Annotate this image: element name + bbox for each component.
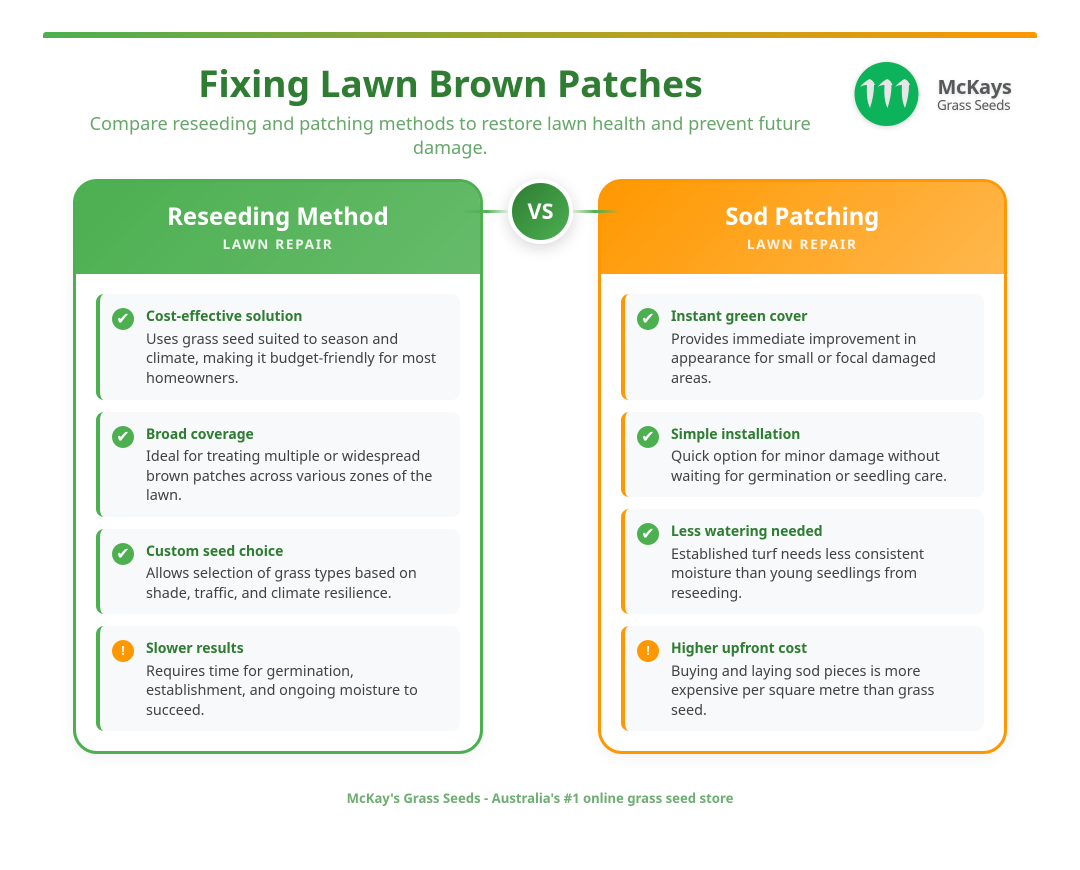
item: instant green cover: Provides immediate improvement in <box>671 330 916 348</box>
item: instant green cover: areas. <box>671 368 712 388</box>
title: Fixing Lawn Brown Patches <box>198 56 703 108</box>
panel header <box>76 182 480 274</box>
panel header: LAWN REPAIR <box>747 234 858 253</box>
item: higher upfront cost: expensive per square metre than grass <box>671 681 934 700</box>
item: broad coverage: Broad coverage <box>146 425 254 444</box>
item: broad coverage: Ideal for treating multiple or widespread <box>146 447 420 466</box>
item: simple installation: Quick option for minor damage without <box>671 447 940 466</box>
VS badge: VS <box>528 197 553 226</box>
item: cost-effective solution: ✔ <box>116 309 130 328</box>
item: custom seed choice: shade, traffic, and climate resilience. <box>146 584 392 602</box>
item: broad coverage: ✔ <box>116 427 130 446</box>
subtitle: damage. <box>413 136 488 160</box>
item: instant green cover: appearance for small or focal damaged <box>671 349 936 368</box>
item: cost-effective solution: Cost-effective solution <box>146 307 302 326</box>
item: custom seed choice: ✔ <box>116 544 130 563</box>
panel: sod patching <box>598 179 1007 754</box>
item: instant green cover <box>621 294 984 400</box>
item: higher upfront cost: Buying and laying sod pieces is more <box>671 662 920 680</box>
item: simple installation: waiting for germination or seedling care. <box>671 466 947 486</box>
item: slower results: establishment, and ongoing moisture to <box>146 681 418 700</box>
item: custom seed choice: Allows selection of grass types based on <box>146 564 417 583</box>
item: higher upfront cost: ! <box>646 642 650 659</box>
logo wordmark: McKays <box>938 73 1012 100</box>
item: instant green cover: ✔ <box>641 309 655 328</box>
item: less watering needed: Established turf needs less consistent <box>671 544 924 564</box>
item: custom seed choice: Custom seed choice <box>146 542 283 561</box>
VS badge <box>508 179 573 244</box>
subtitle: Compare reseeding and patching methods to restore lawn health and prevent future <box>90 112 811 136</box>
item: instant green cover: Instant green cover <box>671 307 808 326</box>
logo wordmark <box>937 73 1012 114</box>
top gradient bar <box>43 32 1037 38</box>
item: higher upfront cost <box>621 626 984 731</box>
panel: reseeding method <box>73 179 483 754</box>
icon: green circle with grass blades <box>852 60 921 130</box>
item: higher upfront cost: seed. <box>671 700 707 720</box>
item: broad coverage <box>96 412 460 517</box>
connector line left <box>462 210 510 213</box>
panel header: LAWN REPAIR <box>223 234 333 253</box>
item: cost-effective solution: climate, making it budget-friendly for most <box>146 349 436 368</box>
item: cost-effective solution <box>96 294 460 400</box>
item: less watering needed: Less watering needed <box>671 522 823 541</box>
item: cost-effective solution: homeowners. <box>146 368 239 388</box>
item: higher upfront cost: Higher upfront cost <box>671 639 807 658</box>
subtitle <box>90 112 811 160</box>
item: slower results <box>96 626 460 731</box>
item: slower results: succeed. <box>146 700 205 720</box>
item: slower results: ! <box>121 642 125 659</box>
item: less watering needed: ✔ <box>641 524 655 543</box>
item: less watering needed: moisture than young seedlings from <box>671 564 917 583</box>
logo: McKays Grass Seeds <box>852 60 1012 130</box>
panel header: Reseeding Method <box>167 200 389 232</box>
item: simple installation <box>621 412 984 497</box>
item: less watering needed <box>621 509 984 614</box>
item: simple installation: Simple installation <box>671 425 800 444</box>
panel header: Sod Patching <box>725 200 879 232</box>
panel header <box>600 182 1004 274</box>
item: cost-effective solution: Uses grass seed suited to season and <box>146 330 398 348</box>
item: slower results: Slower results <box>146 639 244 658</box>
item: custom seed choice <box>96 529 460 614</box>
connector line right <box>570 210 620 213</box>
item: broad coverage: brown patches across various zones of the <box>146 466 432 486</box>
item: simple installation: ✔ <box>641 427 655 446</box>
logo wordmark: Grass Seeds <box>937 96 1010 114</box>
item: slower results: Requires time for germination, <box>146 662 354 680</box>
item: less watering needed: reseeding. <box>671 584 742 602</box>
item: broad coverage: lawn. <box>146 486 182 505</box>
footer: McKay's Grass Seeds - Australia's #1 online grass seed store <box>347 789 733 807</box>
